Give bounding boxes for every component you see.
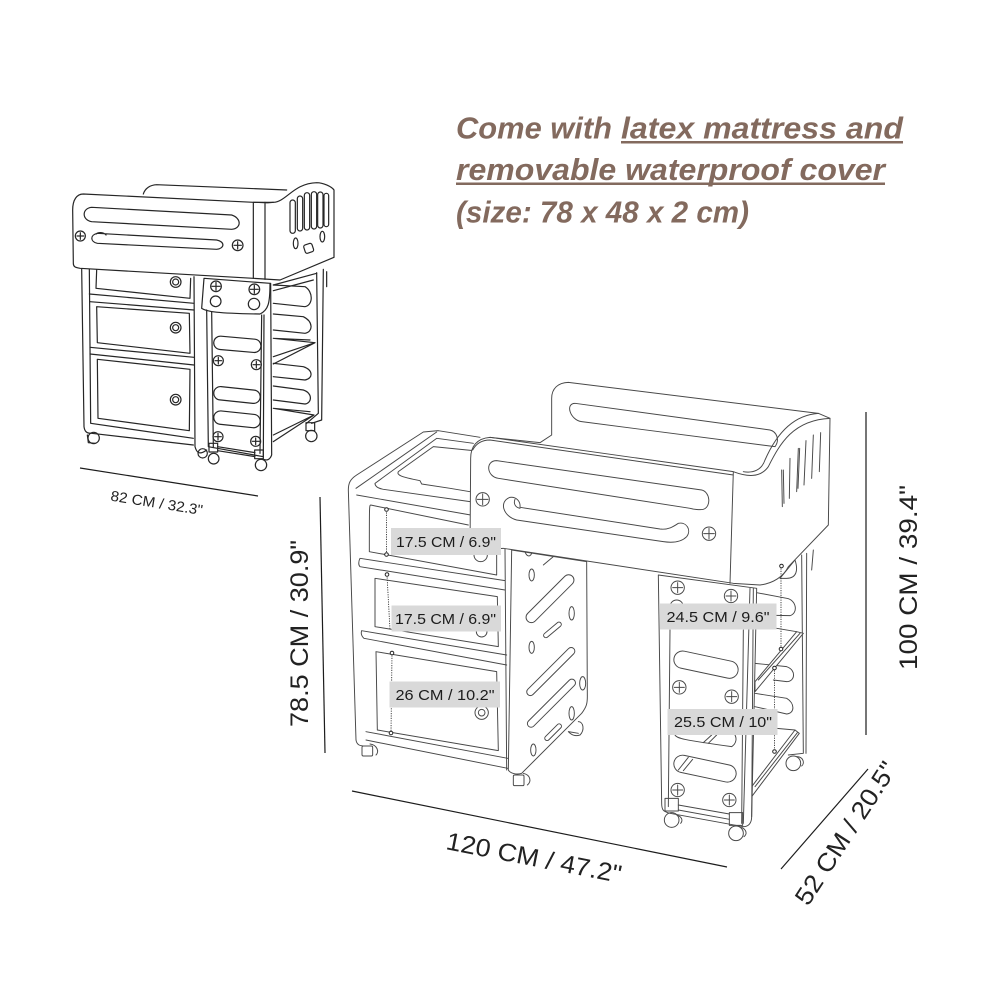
dimension: total length: 120 CM / 47.2" — [444, 827, 624, 889]
heading: mattress note: removable waterproof cover — [456, 152, 887, 187]
heading: mattress note: latex mattress and — [621, 110, 904, 146]
dimension: small view width — [80, 468, 258, 519]
tabletop changing unit — [470, 382, 830, 585]
drawer height markers — [385, 508, 783, 753]
label: drawer 2 height: 17.5 CM / 6.9" — [395, 611, 496, 628]
dimension: total depth: 52 CM / 20.5" — [790, 757, 903, 910]
label: drawer 1 height: 17.5 CM / 6.9" — [396, 534, 496, 551]
label: drawer 2 height — [392, 606, 501, 632]
label: drawer 3 height: 26 CM / 10.2" — [396, 687, 494, 704]
label: upper shelf height: 24.5 CM / 9.6" — [666, 609, 770, 626]
heading: mattress note: Come with — [456, 110, 612, 146]
label: drawer 3 height — [390, 682, 500, 708]
dimension: total height: 100 CM / 39.4" — [895, 485, 923, 670]
dimension: cabinet height — [286, 497, 325, 753]
label: drawer 1 height — [391, 528, 501, 555]
label: lower shelf height: 25.5 CM / 10" — [674, 714, 772, 731]
label: lower shelf height — [668, 709, 778, 735]
heading: mattress note — [456, 110, 904, 230]
label: upper shelf height — [660, 604, 776, 630]
illustration: large view of changing table — [348, 382, 830, 841]
dimension: small view width: 82 CM / 32.3" — [109, 489, 204, 519]
left drawer cabinet — [348, 431, 587, 786]
dimension: total length — [352, 791, 727, 889]
right leg unit — [658, 550, 813, 841]
dimension: cabinet height: 78.5 CM / 30.9" — [286, 540, 314, 727]
heading: mattress note: (size: 78 x 48 x 2 cm) — [456, 194, 749, 230]
illustration: small side view of changing table — [73, 183, 334, 471]
